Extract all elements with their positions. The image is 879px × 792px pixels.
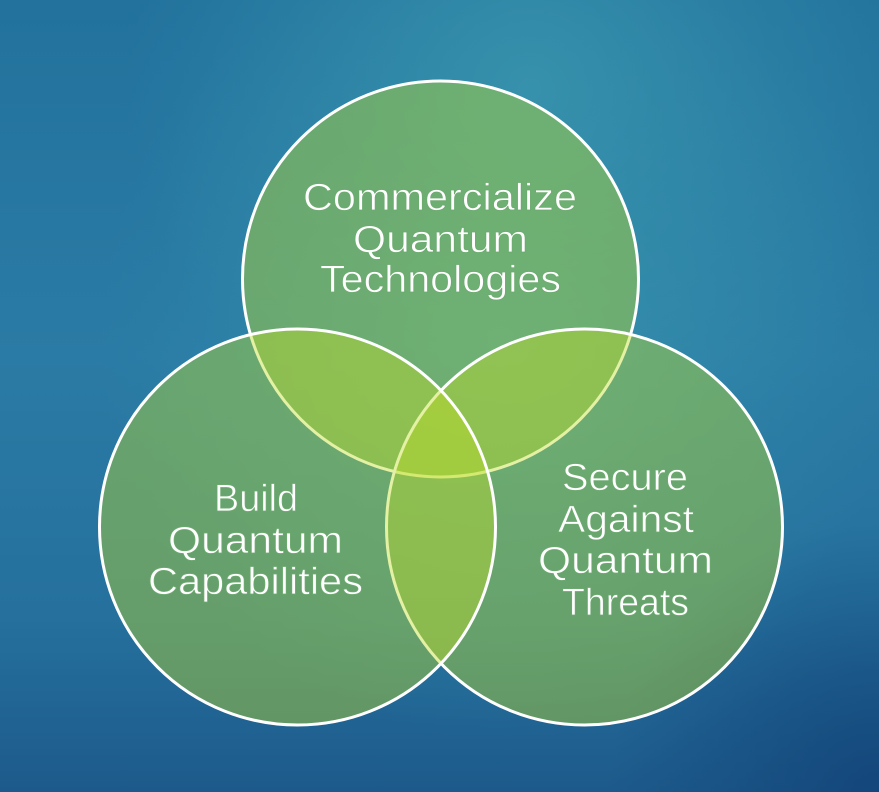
label: commercialize quantum technologies: Technologies — [320, 259, 561, 301]
label: build quantum capabilities: Quantum — [168, 520, 343, 562]
label: secure against quantum threats: Against — [558, 499, 694, 541]
circle: secure against quantum threats — [386, 329, 782, 725]
label: commercialize quantum technologies — [303, 177, 577, 301]
circle: build quantum capabilities — [100, 329, 496, 725]
label: secure against quantum threats: Threats — [562, 582, 689, 624]
label: secure against quantum threats: Secure — [562, 457, 688, 499]
label: build quantum capabilities — [148, 478, 363, 603]
label: commercialize quantum technologies: Quantum — [353, 219, 528, 261]
circle: commercialize quantum technologies — [242, 81, 638, 477]
venn diagram — [100, 81, 782, 725]
label: secure against quantum threats — [538, 457, 713, 624]
label: secure against quantum threats: Quantum — [538, 540, 713, 582]
label: build quantum capabilities: Capabilities — [148, 561, 363, 603]
label: commercialize quantum technologies: Commercialize — [303, 177, 577, 219]
label: build quantum capabilities: Build — [214, 478, 298, 520]
